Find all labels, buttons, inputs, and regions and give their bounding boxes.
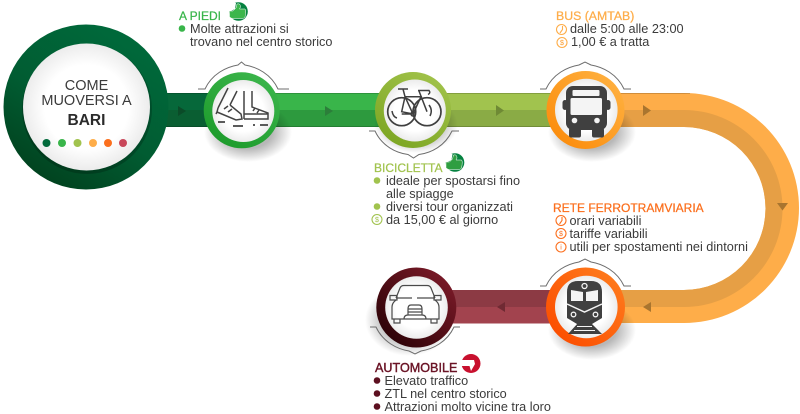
icon: bicycle xyxy=(388,89,441,126)
label: rete ferrotramviaria: orari variabili xyxy=(570,214,641,228)
text: bicicletta: alle spiagge xyxy=(386,187,454,201)
icon: info xyxy=(556,242,566,252)
text: automobile: ZTL nel centro storico xyxy=(384,387,507,401)
label: bus: dalle 5:00 alle 23:00 xyxy=(570,22,684,36)
road segment: orange curve xyxy=(585,93,799,323)
heading: automobile: AUTOMOBILE xyxy=(375,361,457,375)
text: bicicletta: ideale per spostarsi fino xyxy=(386,174,520,188)
text: a piedi: trovano nel centro storico xyxy=(190,35,332,49)
main circle xyxy=(4,24,168,190)
icon: info: i xyxy=(560,244,562,252)
heading: rete ferrotramviaria: RETE FERROTRAMVIARIA xyxy=(553,201,704,215)
label: bicicletta xyxy=(372,153,520,227)
icon: shoes xyxy=(216,88,268,126)
heading: a piedi: A PIEDI xyxy=(179,9,221,23)
title xyxy=(41,78,132,129)
label: rete ferrotramviaria xyxy=(553,201,748,254)
node: automobile xyxy=(365,268,460,356)
text: bicicletta: diversi tour organizzati xyxy=(386,200,513,214)
icon: dollar: $ xyxy=(560,40,564,47)
text: automobile: Elevato traffico xyxy=(384,374,468,388)
node: bus xyxy=(540,62,636,162)
icon: thumb up xyxy=(228,2,248,21)
label: rete ferrotramviaria: tariffe variabili xyxy=(570,227,648,241)
title: BARI xyxy=(68,112,105,129)
node: a piedi xyxy=(198,62,292,162)
icon: dollar xyxy=(372,214,382,224)
icon: dollar xyxy=(556,228,566,238)
road segment: maroon xyxy=(420,290,585,324)
road edge lines xyxy=(160,94,690,126)
colour dots xyxy=(42,139,127,147)
icon: bus xyxy=(562,86,610,138)
label: bus xyxy=(556,9,684,49)
icon: train xyxy=(567,281,602,334)
icon: dollar: $ xyxy=(559,231,563,238)
text: bicicletta xyxy=(372,174,520,227)
label: rete ferrotramviaria: utili per spostamenti nei dintorni xyxy=(570,240,748,254)
road arrows xyxy=(178,105,788,312)
text: a piedi: Molte attrazioni si xyxy=(190,22,289,36)
text: automobile xyxy=(374,374,551,414)
text: bicicletta: da 15,00 € al giorno xyxy=(386,213,498,227)
text: automobile: Attrazioni molto vicine tra loro xyxy=(384,400,551,414)
label: automobile xyxy=(374,354,551,414)
text: a piedi xyxy=(179,22,332,49)
road segment: lime xyxy=(390,93,580,127)
icon: car xyxy=(390,286,441,323)
icon: dollar: $ xyxy=(375,217,379,224)
title: COME xyxy=(65,78,109,94)
node: rete ferrotramviaria xyxy=(540,259,636,360)
road segment: green xyxy=(240,93,390,127)
icon: clock xyxy=(556,216,566,226)
road segment: dark green xyxy=(160,93,220,127)
heading: bicicletta: BICICLETTA xyxy=(374,161,442,175)
icon: clock xyxy=(556,24,566,34)
label: a piedi xyxy=(179,2,332,49)
label: bus: 1,00 € a tratta xyxy=(571,35,650,49)
title: MUOVERSI A xyxy=(41,93,132,109)
icon: thumb up xyxy=(444,153,464,172)
heading: bus: BUS (AMTAB) xyxy=(556,9,634,23)
icon: thumb down xyxy=(460,354,480,373)
node: bicicletta xyxy=(369,72,459,158)
